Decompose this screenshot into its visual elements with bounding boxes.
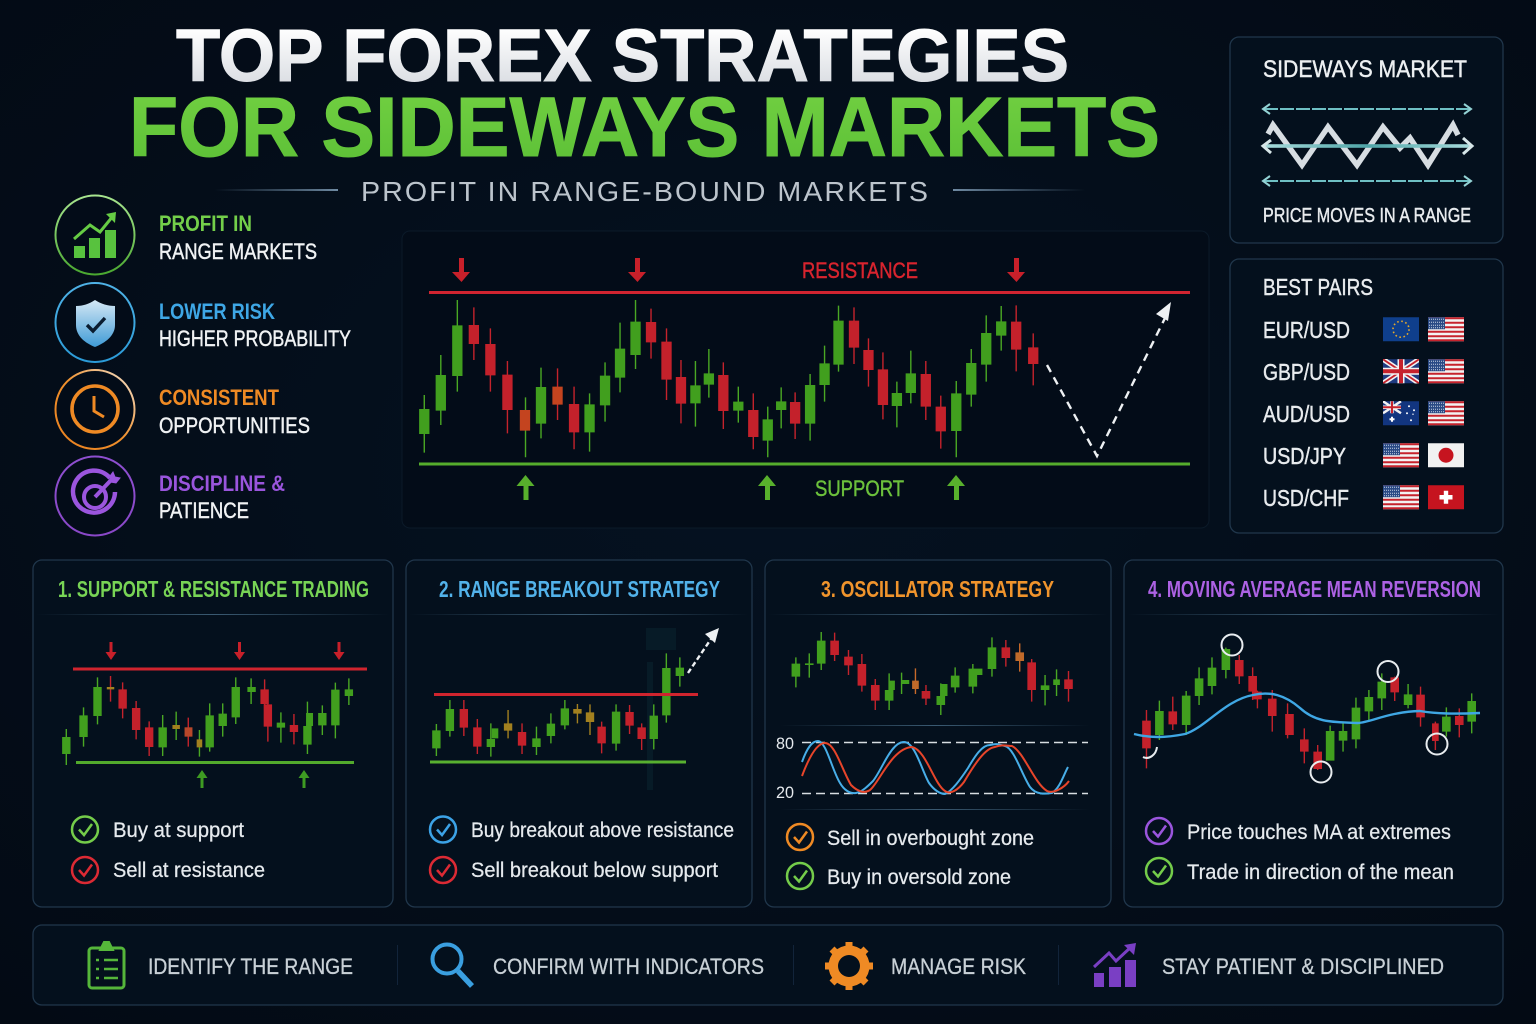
pair: GBP/USD: [1263, 359, 1464, 385]
panel: best pairs: BEST PAIRS: [1263, 274, 1373, 300]
price candles: [1142, 648, 1476, 770]
pair: EUR/USD: [1263, 317, 1464, 343]
title: [129, 14, 1160, 174]
panel: best pairs: [1230, 259, 1503, 533]
oscillator chart: 20: [776, 783, 794, 802]
panel: sideways market: [1230, 37, 1503, 243]
pair: EUR/USD: EUR/USD: [1263, 317, 1350, 343]
benefit: profit in range markets: RANGE MARKETS: [159, 239, 317, 264]
checklist: [1146, 818, 1454, 884]
step: confirm with indicators: CONFIRM WITH INDICATORS: [493, 954, 764, 979]
checklist: [787, 824, 1034, 889]
moving average line: [1134, 694, 1480, 737]
checklist: Buy at support: [113, 819, 244, 842]
dashed projection arrow: [1047, 302, 1171, 456]
step: manage risk: MANAGE RISK: [891, 954, 1026, 979]
benefit: profit in range markets: PROFIT IN: [159, 211, 252, 236]
subtitle: PROFIT IN RANGE-BOUND MARKETS: [361, 176, 930, 207]
icon: gear: [825, 942, 873, 990]
step: stay patient and disciplined: STAY PATIENT & DISCIPLINED: [1162, 954, 1444, 979]
title: FOR SIDEWAYS MARKETS: [129, 80, 1160, 174]
checklist: Sell breakout below support: [471, 859, 718, 882]
pair: GBP/USD: GBP/USD: [1263, 359, 1350, 385]
checklist: [430, 816, 734, 883]
pair: USD/JPY: [1263, 443, 1464, 469]
dashed breakout arrow: [688, 628, 719, 673]
bottom bar: [33, 925, 1503, 1005]
label: support: SUPPORT: [815, 476, 904, 501]
checklist: [72, 816, 265, 883]
checklist: Buy in oversold zone: [827, 866, 1011, 889]
benefit: consistent opportunities: [56, 370, 310, 449]
benefit: profit in range markets: [56, 196, 317, 274]
title: TOP FOREX STRATEGIES: [176, 14, 1069, 97]
benefit: lower risk: [56, 283, 351, 362]
pair: AUD/USD: AUD/USD: [1263, 401, 1350, 427]
buy arrows: [516, 475, 965, 500]
benefit: consistent opportunities: OPPORTUNITIES: [159, 413, 310, 438]
benefit: lower risk: HIGHER PROBABILITY: [159, 326, 351, 351]
extreme touch circles: [1143, 634, 1448, 782]
icon: price zigzag in a range: [1263, 104, 1472, 186]
breakout line over candle: [634, 693, 698, 696]
resistance line: [429, 291, 1190, 294]
benefit: lower risk: LOWER RISK: [159, 299, 275, 324]
checklist: Sell in overbought zone: [827, 827, 1034, 850]
pair: USD/CHF: [1263, 485, 1464, 511]
pair: AUD/USD: [1263, 401, 1464, 427]
icon: purple growth chart: [1094, 943, 1136, 987]
candlesticks: [419, 300, 1038, 457]
panel: range breakout strategy: 2. RANGE BREAKOUT STRATEGY: [439, 576, 720, 602]
checklist: Trade in direction of the mean: [1187, 861, 1454, 884]
benefit: discipline and patience: [56, 456, 285, 536]
price candles: [792, 632, 1073, 715]
mini chart: [430, 628, 719, 790]
benefit: consistent opportunities: CONSISTENT: [159, 385, 279, 410]
panel: oscillator strategy: 3. OSCILLATOR STRATEGY: [821, 576, 1054, 602]
step: identify the range: IDENTIFY THE RANGE: [148, 954, 353, 979]
pair: USD/CHF: USD/CHF: [1263, 485, 1349, 511]
icon: rising chart: [74, 212, 116, 258]
panel: moving average mean reversion: [1124, 560, 1503, 907]
oscillator chart: [776, 734, 1088, 802]
oscillator chart: 80: [776, 734, 794, 753]
benefit: discipline and patience: DISCIPLINE &: [159, 471, 285, 496]
panel: support and resistance trading: [33, 560, 393, 907]
sell arrows: [452, 258, 1025, 282]
panel: sideways market: PRICE MOVES IN A RANGE: [1263, 205, 1471, 227]
panel: main range chart: [402, 231, 1209, 528]
panel: support and resistance trading: 1. SUPPORT & RESISTANCE TRADING: [58, 576, 369, 602]
icon: magnifier: [432, 944, 472, 986]
icon: clock: [72, 386, 118, 432]
icon: clipboard checklist: [89, 942, 124, 988]
label: resistance: RESISTANCE: [802, 258, 918, 283]
icon: shield with check: [76, 300, 115, 347]
checklist: Sell at resistance: [113, 859, 265, 882]
pair: USD/JPY: USD/JPY: [1263, 443, 1346, 469]
mini chart: [62, 642, 367, 788]
checklist: Price touches MA at extremes: [1187, 821, 1451, 844]
panel: range breakout strategy: [406, 560, 752, 907]
panel: sideways market: SIDEWAYS MARKET: [1263, 56, 1467, 83]
benefit: discipline and patience: PATIENCE: [159, 498, 249, 523]
support line: [419, 462, 1190, 466]
icon: target with arrow: [73, 471, 120, 513]
checklist: Buy breakout above resistance: [471, 819, 734, 842]
panel: oscillator strategy: [765, 560, 1111, 907]
